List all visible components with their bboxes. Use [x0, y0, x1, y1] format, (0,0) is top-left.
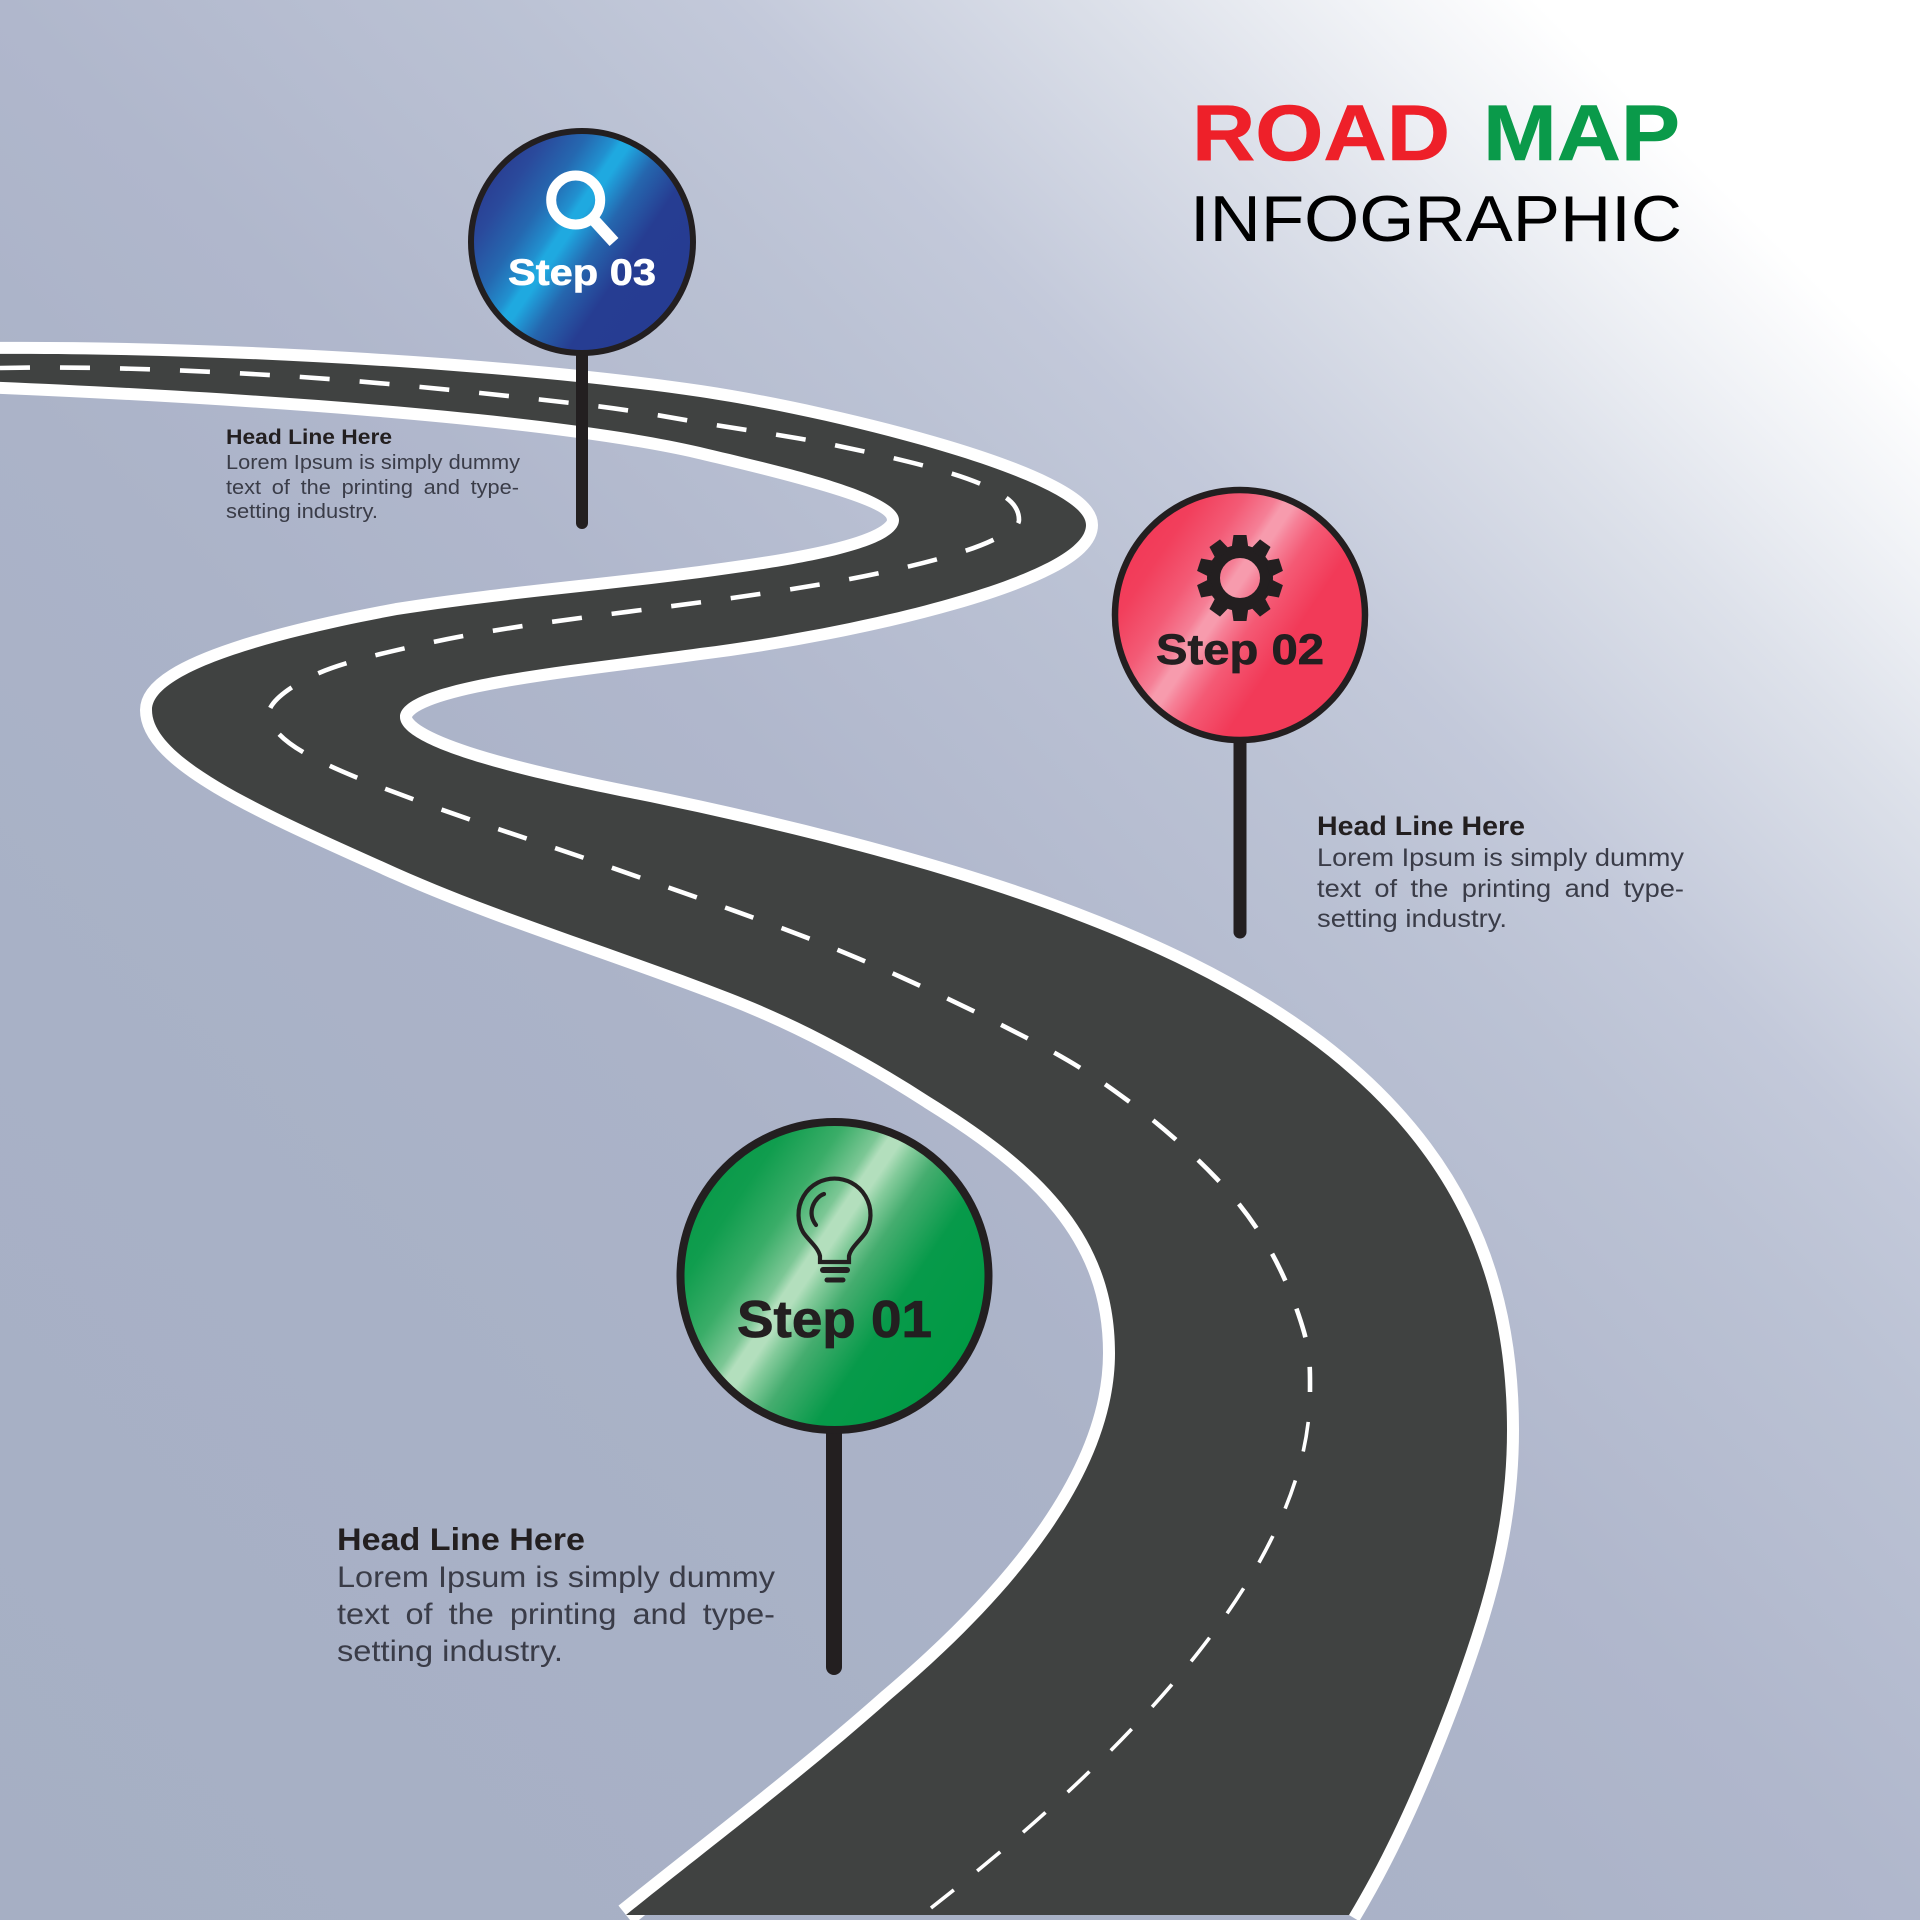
step label: Step 02 [1156, 626, 1324, 674]
pin disc [680, 1122, 988, 1430]
pin: step 01 [680, 1122, 988, 1667]
icon: magnifying glass [551, 176, 614, 242]
body text [226, 452, 520, 523]
road centre dashed line, upper part [0, 367, 1310, 1392]
pin pole [576, 350, 588, 523]
pin disc [471, 131, 693, 353]
road centre dashed line, lower part [931, 1392, 1310, 1908]
title word: ROAD: ROAD [1192, 88, 1450, 177]
pin pole [826, 1430, 842, 1667]
text block: step 02 [1317, 811, 1685, 933]
body text: text of the printing and type- [1317, 875, 1684, 903]
headline: Head Line Here [226, 425, 392, 449]
body text: setting industry. [337, 1635, 563, 1668]
road outer white edge line [0, 354, 1507, 1915]
body text: setting industry. [1317, 905, 1507, 933]
step label: Step 03 [508, 252, 656, 293]
body text: setting industry. [226, 501, 378, 523]
pin: step 03 [471, 131, 693, 523]
road inner white edge line [0, 381, 1115, 1915]
body text: Lorem Ipsum is simply dummy [1317, 844, 1685, 872]
body text [1317, 844, 1685, 933]
text block: step 01 [337, 1521, 775, 1668]
body text: Lorem Ipsum is simply dummy [337, 1561, 775, 1594]
title word: MAP: MAP [1483, 88, 1680, 177]
text block: step 03 [226, 425, 520, 523]
body text: Lorem Ipsum is simply dummy [226, 452, 520, 474]
icon: light bulb [798, 1179, 870, 1280]
body text: text of the printing and type- [226, 477, 519, 499]
title word: INFOGRAPHIC: INFOGRAPHIC [1190, 182, 1682, 255]
pin pole [1234, 735, 1246, 932]
body text [337, 1561, 775, 1668]
road asphalt surface [0, 354, 1507, 1915]
body text: text of the printing and type- [337, 1598, 775, 1631]
pin: step 02 [1115, 490, 1365, 932]
pin disc [1115, 490, 1365, 740]
headline: Head Line Here [337, 1521, 585, 1557]
winding road [0, 354, 1507, 1915]
icon: gear [1196, 535, 1284, 621]
step label: Step 01 [737, 1291, 932, 1349]
headline: Head Line Here [1317, 811, 1525, 841]
title [1190, 88, 1682, 255]
